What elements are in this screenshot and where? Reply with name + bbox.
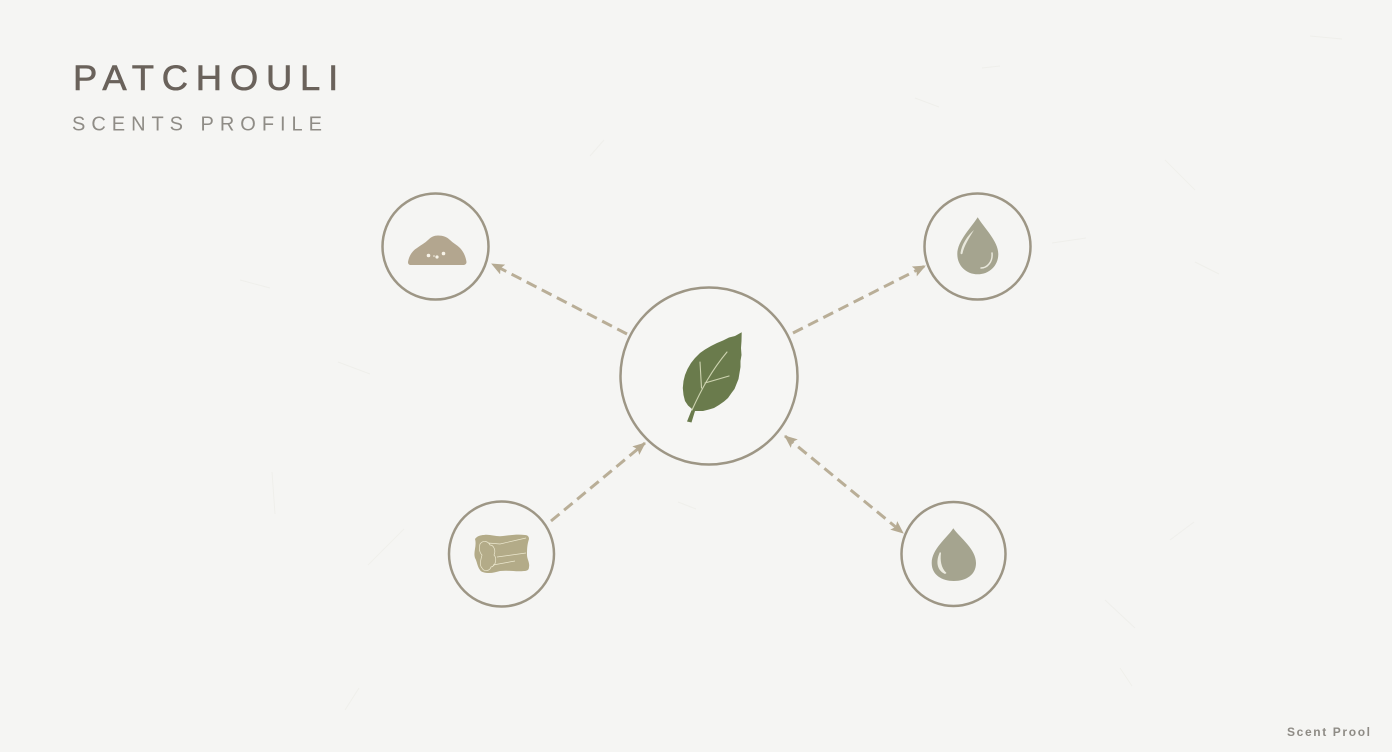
- central node: patchouli leaf: [620, 288, 798, 464]
- arrow: double-headed centre to bottom-right: [785, 436, 903, 533]
- arrow: centre to top-right: [793, 266, 925, 333]
- footer text: Scent Prool: [1287, 725, 1370, 739]
- icon: oil drop: [957, 217, 998, 274]
- icon: mound: [408, 236, 466, 265]
- subtitle: SCENTS PROFILE: [72, 114, 322, 136]
- arrow: centre to top-left: [492, 264, 627, 334]
- node: top-left resin mound: [382, 194, 488, 300]
- icon: leaf: [683, 332, 742, 422]
- icon: oil drop: [932, 528, 976, 581]
- node: bottom-right oil drop: [902, 502, 1006, 606]
- node: bottom-left wood log: [449, 502, 554, 606]
- arrow: bottom-left to centre: [551, 443, 645, 521]
- icon: wood log: [474, 535, 529, 573]
- title: PATCHOULI: [73, 59, 338, 98]
- node: top-right oil drop: [924, 194, 1030, 300]
